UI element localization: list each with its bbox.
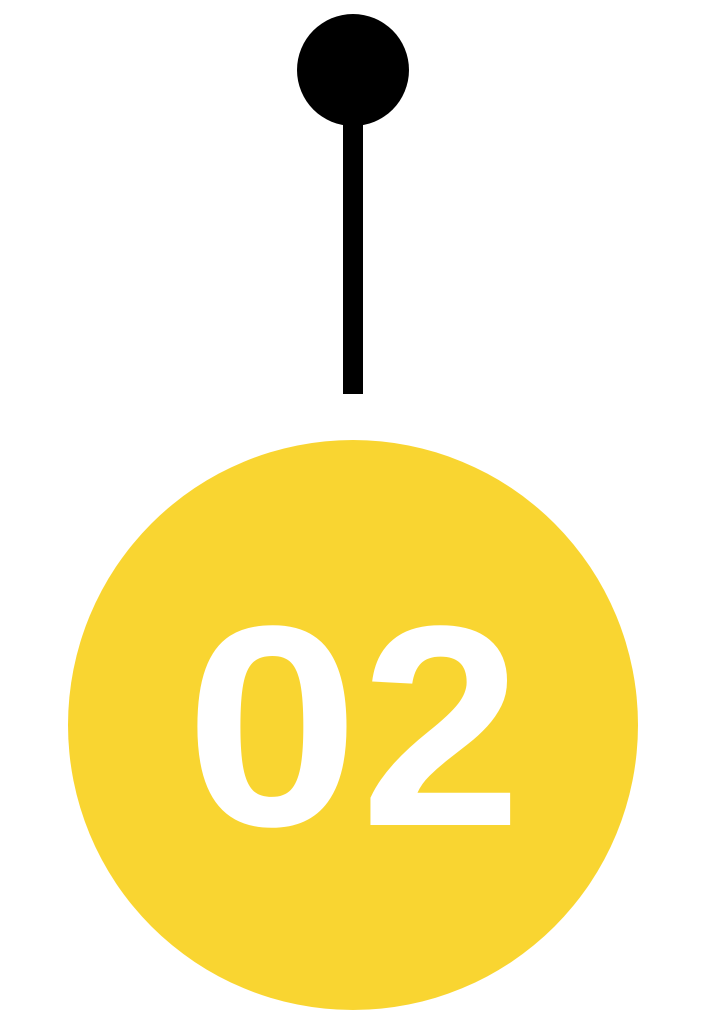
icon: black pin [297,14,409,394]
yellow number badge [68,440,638,1010]
number: 02: 0 [185,566,359,886]
number: 02 [185,566,522,887]
number: 02: 2 [360,567,522,887]
